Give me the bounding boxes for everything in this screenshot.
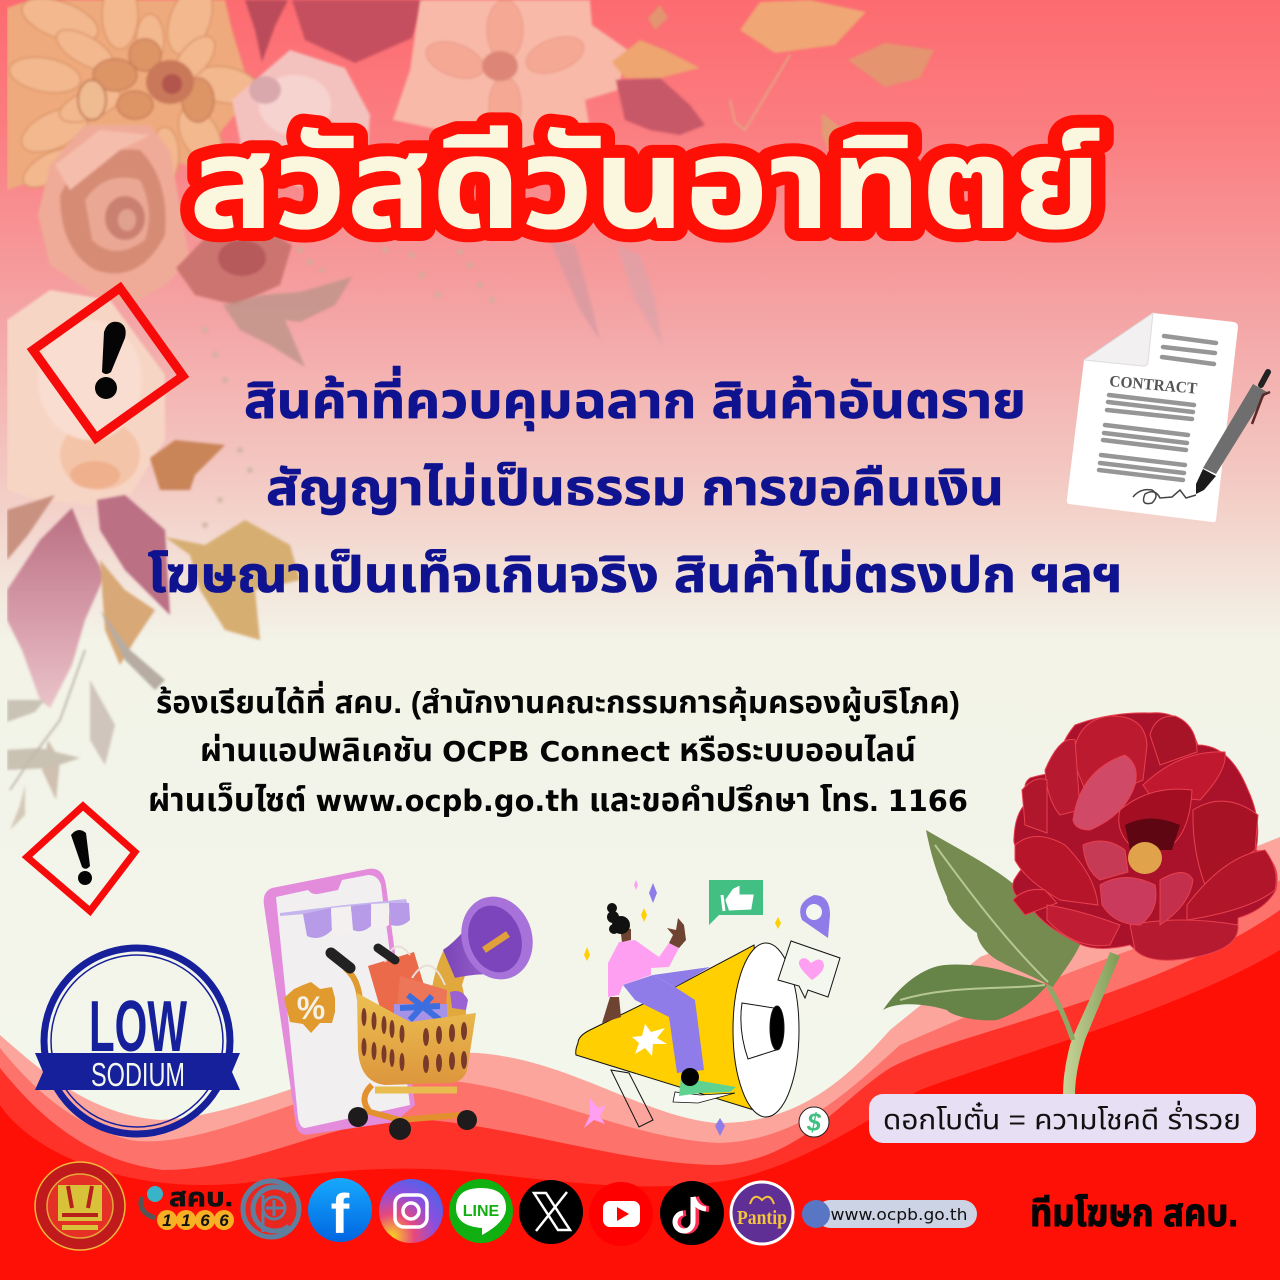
burst on speaker xyxy=(632,1024,667,1056)
heading line 3: โฆษณาเป็นเท็จเกินจริง สินค้าไม่ตรงปก ฯลฯ xyxy=(148,547,1122,603)
leaf shading xyxy=(900,845,1048,1000)
thumbs up bubble xyxy=(709,880,763,925)
flower meaning label xyxy=(869,1094,1256,1143)
leaf lower xyxy=(883,965,1047,1020)
discount badge: % xyxy=(297,990,325,1026)
leaf upper xyxy=(926,830,1081,987)
heading line 1: สินค้าที่ควบคุมฉลาก สินค้าอันตราย xyxy=(244,366,1026,431)
badge word low: LOW xyxy=(89,987,187,1067)
hotline digits: 6 xyxy=(219,1211,229,1230)
footer website link: www.ocpb.go.th xyxy=(830,1205,968,1224)
hotline label: สคบ. xyxy=(169,1182,233,1212)
footer icon: tiktok xyxy=(660,1181,724,1245)
leaf: brown and gold leaves xyxy=(100,440,300,690)
footer icon: line xyxy=(449,1179,513,1243)
speaker body xyxy=(576,943,799,1127)
body line 2: ผ่านแอปพลิเคชัน OCPB Connect หรือระบบออนไลน์ xyxy=(200,732,916,768)
footer icon: x xyxy=(519,1180,583,1244)
hotline digits: 1 xyxy=(181,1211,191,1230)
flower: pale peach rose lower left xyxy=(7,290,165,505)
footer icon: instagram xyxy=(379,1179,443,1243)
footer website link xyxy=(802,1200,977,1228)
shopping bags and gift xyxy=(368,946,447,1030)
contract label: CONTRACT xyxy=(1109,373,1198,398)
illustration: woman riding megaphone xyxy=(576,880,840,1137)
body text: how to complain xyxy=(148,680,968,818)
hotline digits: 6 xyxy=(200,1211,210,1230)
signature xyxy=(1133,490,1196,504)
woman xyxy=(602,903,736,1103)
shopping cart xyxy=(331,948,477,1140)
flower: leaves and sprigs xyxy=(177,0,934,528)
warning icon: small exclamation diamond xyxy=(27,806,135,911)
footer icon: ocpb logo xyxy=(243,1181,299,1237)
wave layers bottom xyxy=(0,837,1280,1280)
megaphone xyxy=(430,887,543,1020)
peony flower xyxy=(1013,713,1277,960)
footer icon: pantip: Pantip xyxy=(737,1207,787,1229)
footer icon: line: LINE xyxy=(463,1203,500,1220)
decorative watercolor florals top left xyxy=(7,0,934,830)
footer icon: pantip xyxy=(731,1182,793,1244)
body line 3: ผ่านเว็บไซต์ www.ocpb.go.th และขอคำปรึกษา โทร. 1166 xyxy=(148,781,968,818)
hotline digits: 1 xyxy=(162,1211,172,1230)
stem xyxy=(1063,952,1120,1095)
illustration: phone shopping cart with megaphone xyxy=(264,869,543,1140)
footer seal: consumer protection board xyxy=(35,1162,125,1250)
leaf: mauve leaves xyxy=(7,495,170,708)
flower: small dark rose xyxy=(176,232,292,305)
flower: pale pink rose xyxy=(232,50,370,187)
badge: low sodium stamp xyxy=(35,948,240,1134)
dollar coin: $ xyxy=(806,1109,822,1137)
heading: product and contract topics xyxy=(148,366,1122,603)
discount badge xyxy=(284,982,335,1033)
flower: pale peach dahlia xyxy=(393,0,628,150)
illustration: red peony with leaves xyxy=(883,713,1277,1095)
body line 1: ร้องเรียนได้ที่ สคบ. (สำนักงานคณะกรรมการคุ้มครองผู้บริโภค) xyxy=(156,680,960,721)
heart speech bubble xyxy=(778,941,840,998)
flower: dusty pink rose xyxy=(38,125,190,305)
title: สวัสดีวันอาทิตย์ xyxy=(189,113,1101,256)
flower: orange dahlia xyxy=(7,0,262,195)
flower: crimson bud xyxy=(245,0,424,63)
location pin xyxy=(800,895,830,938)
peony stamens xyxy=(1128,842,1162,874)
hotline digits xyxy=(157,1210,234,1230)
footer icon: facebook: f xyxy=(331,1182,350,1245)
dollar coin xyxy=(799,1107,829,1137)
pen xyxy=(1196,372,1270,494)
footer icon: facebook xyxy=(308,1178,372,1245)
footer icon: youtube xyxy=(589,1182,653,1246)
leaf: grey sage sprigs xyxy=(7,650,115,830)
stem branch xyxy=(1048,985,1073,1040)
footer icon: hotline 1166 xyxy=(141,1182,234,1230)
sparkles xyxy=(584,880,781,1136)
warning icon: large exclamation diamond xyxy=(33,288,183,438)
phone xyxy=(264,869,415,1135)
flower meaning label: ดอกโบตั๋น = ความโชคดี ร่ำรวย xyxy=(883,1100,1241,1135)
badge word sodium: SODIUM xyxy=(91,1056,185,1093)
contract illustration xyxy=(1067,313,1270,522)
footer team credit: ทีมโฆษก สคบ. xyxy=(1030,1193,1238,1235)
heading line 2: สัญญาไม่เป็นธรรม การขอคืนเงิน xyxy=(266,460,1004,516)
